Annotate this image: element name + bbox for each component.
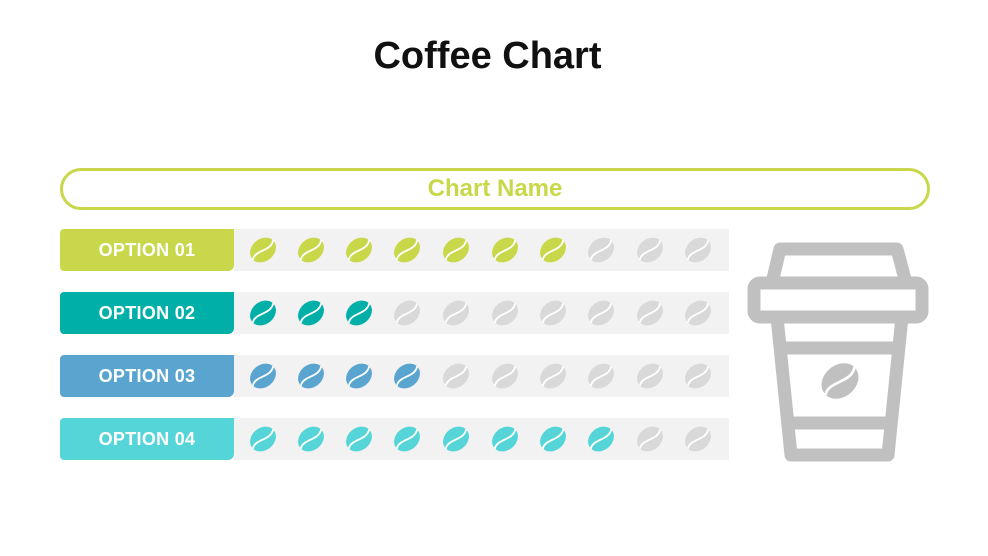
- row 3: [60, 355, 729, 397]
- row 2: [60, 292, 729, 334]
- row 3: OPTION 03: [99, 366, 195, 386]
- row 4: [60, 418, 729, 460]
- row 1: [60, 229, 729, 271]
- row 2: OPTION 02: [99, 303, 195, 323]
- title: Coffee Chart: [373, 35, 602, 77]
- row 4: OPTION 04: [99, 429, 195, 449]
- row 1: OPTION 01: [99, 240, 195, 260]
- chart name pill: Chart Name: [428, 175, 562, 202]
- icon: coffee cup: [748, 242, 928, 462]
- chart name pill: [60, 168, 930, 210]
